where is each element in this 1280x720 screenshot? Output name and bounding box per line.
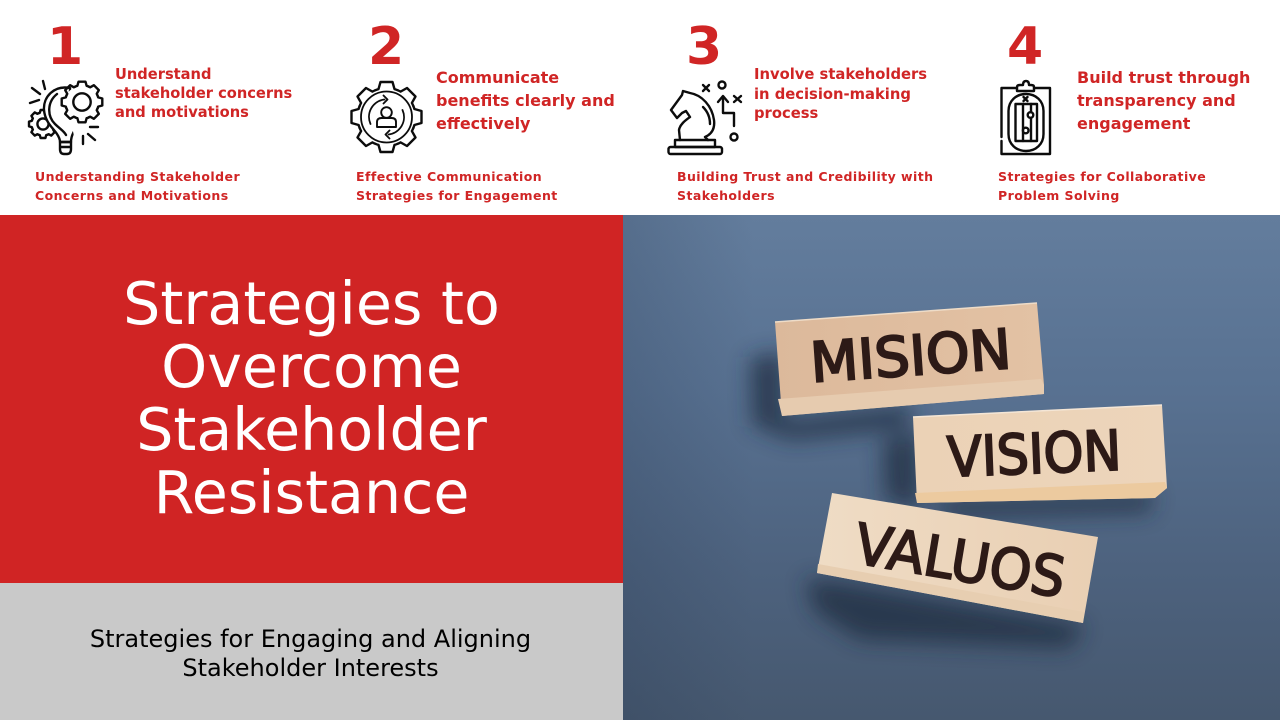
- title panel: Overcome: [161, 333, 462, 401]
- block: MISION: [775, 303, 1044, 416]
- heading 1: stakeholder concerns: [115, 85, 292, 102]
- icon: chess knight with play arrows: [667, 80, 742, 156]
- subheading 1: Concerns and Motivations: [35, 188, 229, 203]
- block: MISION: MISION: [808, 317, 1013, 395]
- subtitle panel: [0, 583, 623, 720]
- heading 4: Build trust through: [1077, 68, 1250, 87]
- heading 2: benefits clearly and: [436, 91, 615, 110]
- step 1: understand concerns: [28, 17, 292, 203]
- number 4: 4: [1007, 17, 1043, 77]
- heading 3: [754, 66, 927, 122]
- heading 3: Involve stakeholders: [754, 66, 927, 83]
- photo: wooden blocks on blue background: [623, 215, 1280, 720]
- step 4: build trust: [998, 17, 1250, 203]
- heading 2: Communicate: [436, 68, 559, 87]
- heading 3: process: [754, 105, 818, 122]
- subheading 3: Stakeholders: [677, 188, 775, 203]
- number 2: 2: [368, 17, 404, 77]
- subheading 2: [356, 169, 558, 203]
- number 3: 3: [686, 17, 722, 77]
- subheading 4: Strategies for Collaborative: [998, 169, 1206, 184]
- subheading 3: Building Trust and Credibility with: [677, 169, 933, 184]
- heading 2: effectively: [436, 114, 530, 133]
- heading 4: [1077, 68, 1250, 133]
- heading 3: in decision-making: [754, 86, 911, 102]
- step 2: communicate benefits: [350, 17, 615, 203]
- number 1: 1: [47, 17, 83, 77]
- title panel: Stakeholder: [136, 396, 487, 464]
- block shadows: [750, 352, 1155, 648]
- subheading 4: [998, 169, 1206, 203]
- subtitle panel: Stakeholder Interests: [182, 654, 439, 682]
- title panel: Resistance: [154, 459, 469, 527]
- heading 4: engagement: [1077, 114, 1190, 133]
- step 3: involve stakeholders: [667, 17, 933, 203]
- icon: clipboard with tactics board: [1000, 80, 1052, 156]
- icon: light bulb with gears: [28, 80, 104, 156]
- subheading 1: [35, 169, 240, 203]
- heading 1: [115, 66, 292, 121]
- title panel: [0, 215, 623, 583]
- heading 4: transparency and: [1077, 91, 1236, 110]
- block: VISION: VISION: [946, 419, 1122, 489]
- subheading 2: Strategies for Engagement: [356, 188, 558, 203]
- block: VISION: [913, 405, 1167, 503]
- icon: gear with person: [350, 80, 423, 154]
- block: VALUOS: VALUOS: [850, 512, 1070, 611]
- subtitle panel: Strategies for Engaging and Aligning: [90, 625, 531, 653]
- heading 1: and motivations: [115, 104, 249, 121]
- heading 2: [436, 68, 615, 133]
- subheading 1: Understanding Stakeholder: [35, 169, 240, 184]
- subheading 4: Problem Solving: [998, 188, 1120, 203]
- heading 1: Understand: [115, 66, 211, 83]
- subheading 2: Effective Communication: [356, 169, 542, 184]
- subheading 3: [677, 169, 933, 203]
- title panel: Strategies to: [123, 270, 500, 338]
- block: VALUOS: [817, 493, 1098, 623]
